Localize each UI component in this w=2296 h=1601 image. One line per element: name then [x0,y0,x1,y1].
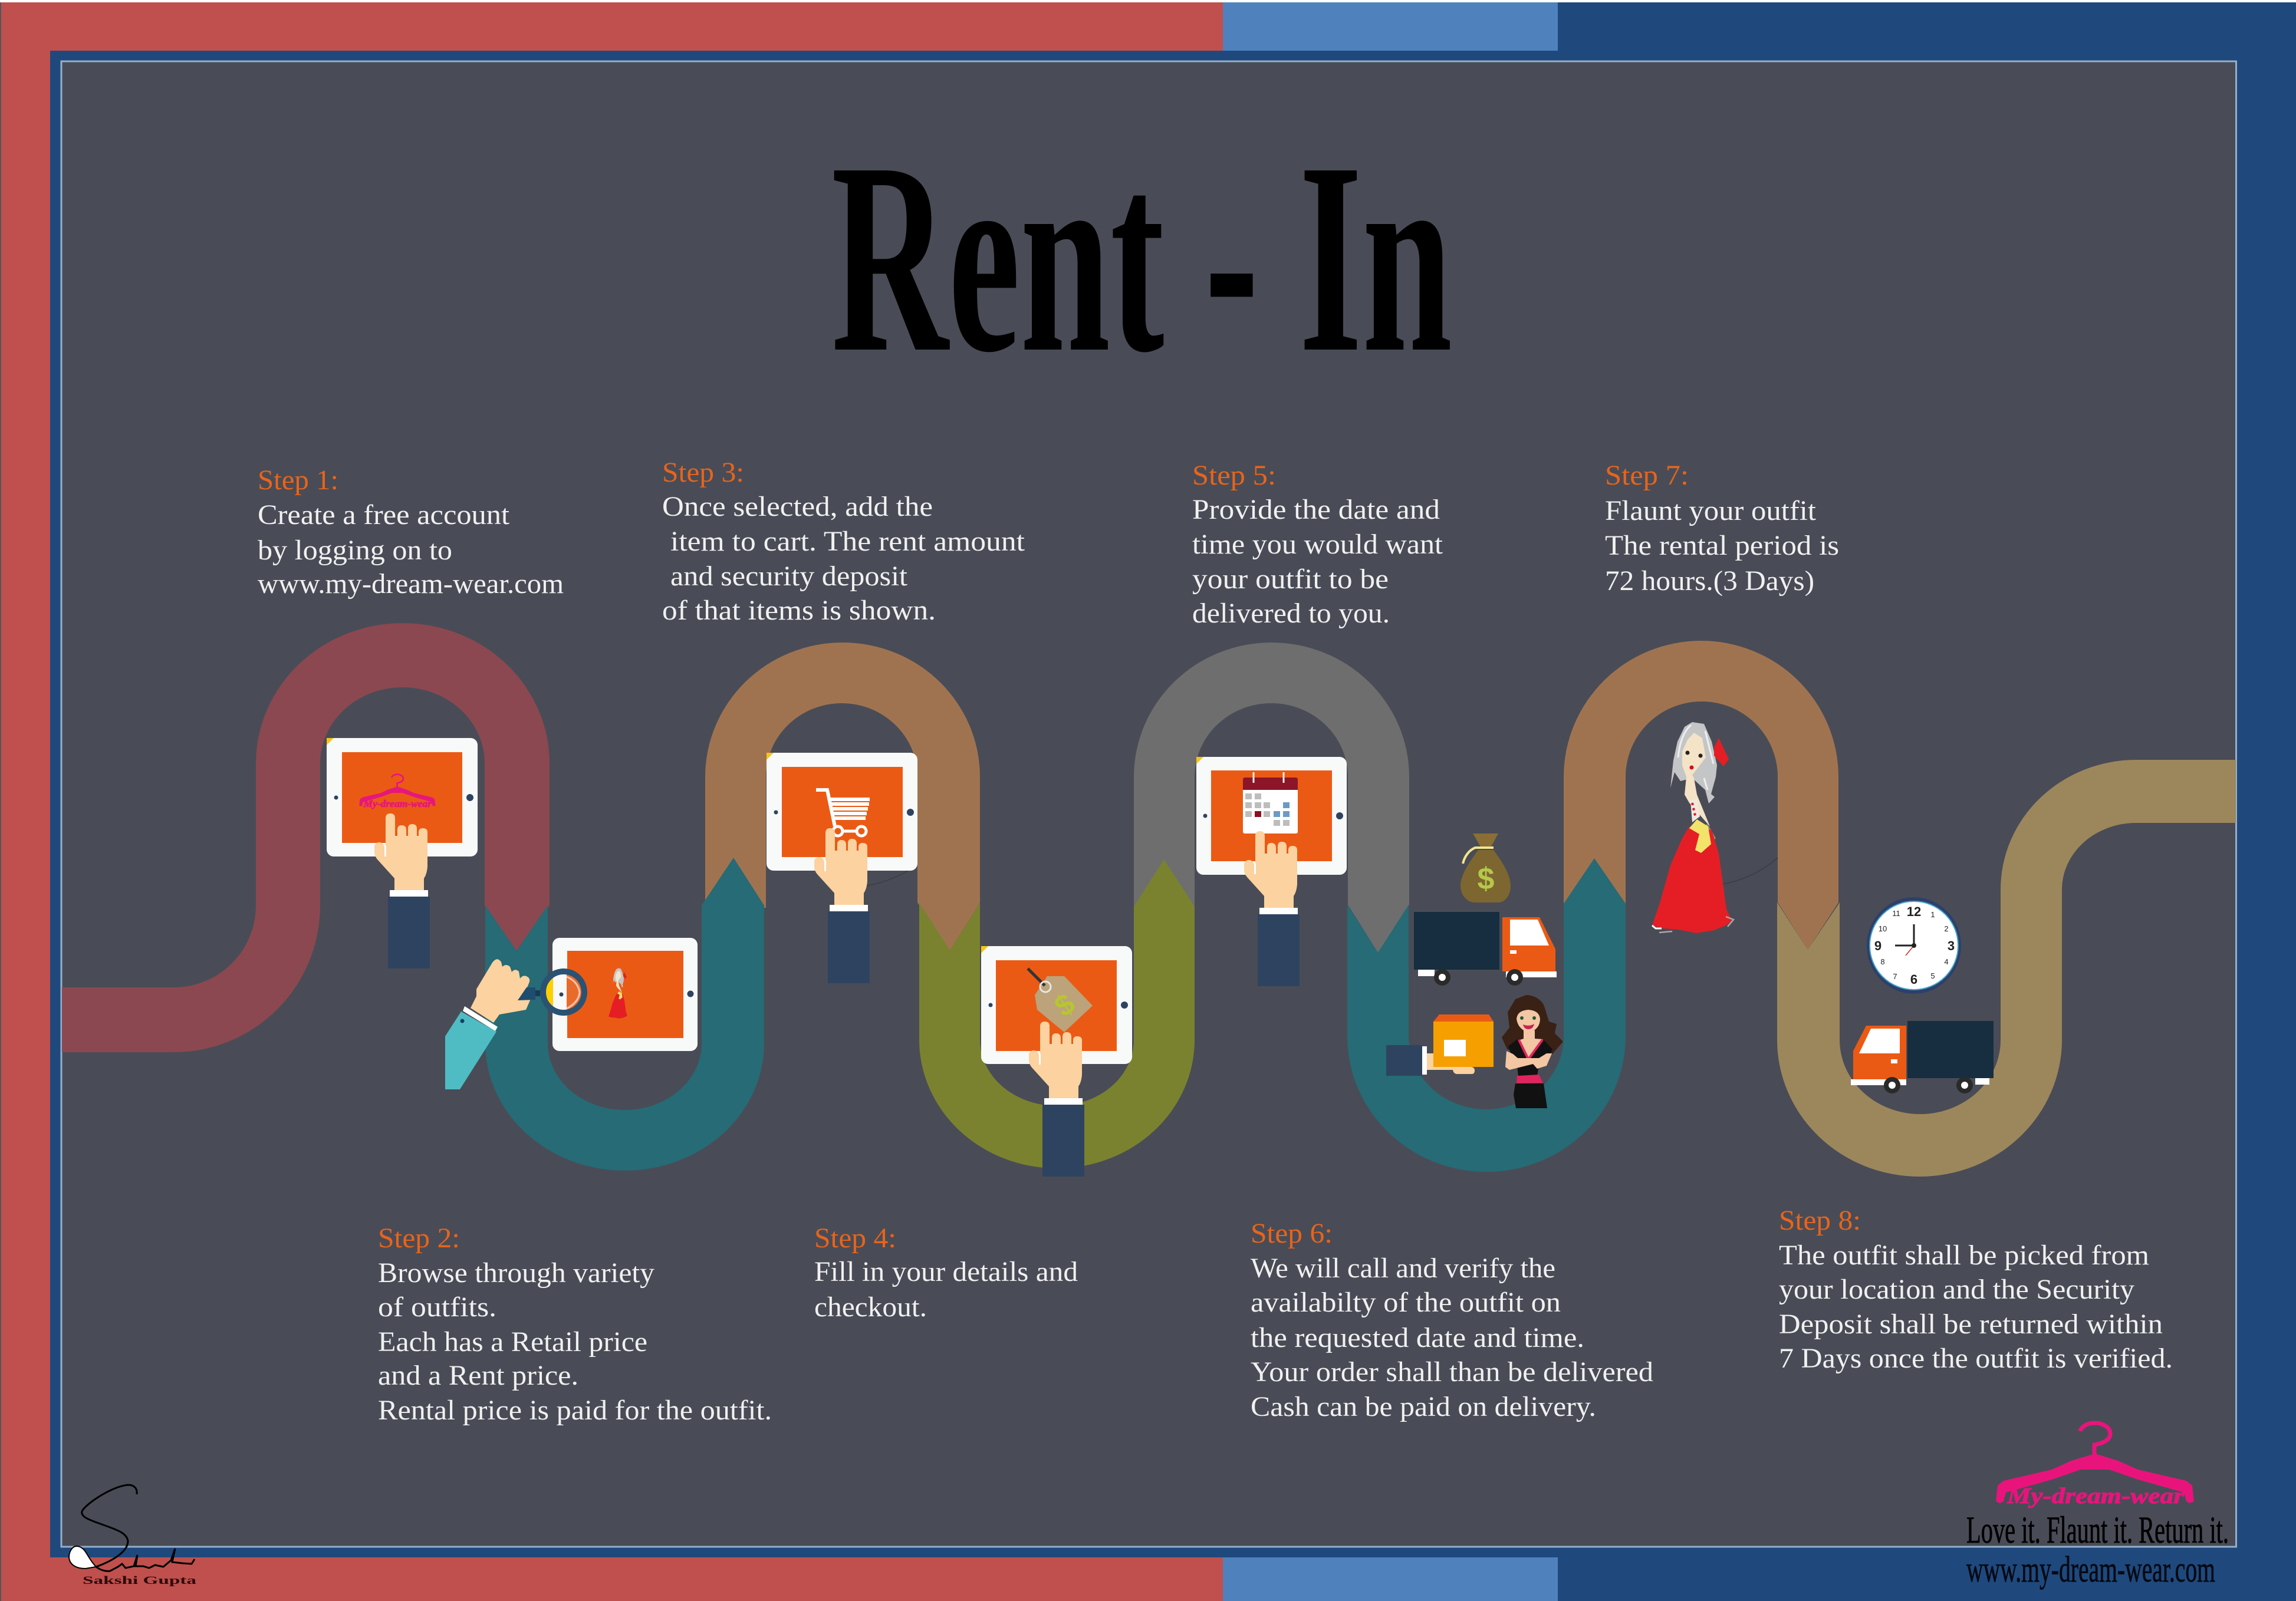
hand with magnifier [445,959,584,1089]
icon: calendar [1243,772,1298,834]
path segment: olive valley [919,859,1195,1168]
icon: hanger logo small [359,775,436,809]
step 4 text: checkout. [814,1292,927,1323]
icon: girl in red dress [1652,722,1733,933]
step 1 text [258,465,564,599]
step 7 text [1605,460,1839,597]
step 2 text: Rental price is paid for the outfit. [378,1395,772,1426]
icon: mini girl in red dress [608,968,627,1019]
icon: shopping cart [816,790,870,836]
hand 5 [1244,831,1300,986]
icon: wall clock: 8 [1880,957,1885,966]
step 2 text: Browse through variety [378,1257,654,1289]
icon: wall clock: 2 [1944,924,1949,933]
path segment: brown arch 2 [1564,641,1838,950]
path segment: gray arch [1134,643,1409,953]
path segment: teal valley 2 [1347,858,1626,1172]
step 6 text: Cash can be paid on delivery. [1251,1391,1596,1422]
step 6 text: the requested date and time. [1251,1322,1584,1353]
step 6 text [1251,1218,1653,1422]
step 6 text: Step 6: [1251,1218,1333,1249]
icon: wall clock: 3 [1948,938,1955,953]
icon: hanger: My-dream-wear [2006,1484,2185,1508]
hand 4 [1029,1022,1084,1177]
step 8 text: 7 Days once the outfit is verified. [1779,1343,2173,1374]
tablet 1: logo [327,738,478,856]
hand 1 [374,813,430,968]
brand logo [1966,1423,2229,1590]
tablet 3: cart [767,753,917,871]
tablet 2: browse [552,938,698,1051]
path segment: red arch [62,623,550,1052]
step 8 text: Step 8: [1779,1205,1861,1236]
hand 3 [814,828,870,983]
step 3 text: Once selected, add the [662,491,933,522]
icon: wall clock: 9 [1874,938,1881,953]
step 5 text: delivered to you. [1192,598,1390,629]
icon: wall clock: 10 [1879,924,1887,933]
icon: magnifier lens [543,971,584,1013]
icon: hanger logo small: My-dream-wear [363,798,432,809]
icon: return truck [1851,1021,1994,1093]
icon: woman in black dress [1502,995,1563,1108]
icon: hanger [1996,1423,2194,1508]
step 5 text: Provide the date and [1192,494,1440,525]
step 2 text: Step 2: [378,1223,460,1254]
step 5 text: your outfit to be [1192,564,1389,595]
step 4 text: Step 4: [814,1223,896,1254]
tablet 5: calendar [1196,757,1347,875]
icon: wall clock: 6 [1910,972,1917,987]
icon: money bag: $ [1478,862,1495,896]
path segment: brown arch 1 [705,643,980,950]
icon: hand holding parcel [1386,1014,1494,1076]
icon: wall clock: 5 [1930,971,1935,980]
icon: money bag [1461,834,1511,902]
step 1 text: Create a free account [258,499,510,531]
step 1 text: www.my-dream-wear.com [258,568,564,599]
step 3 text [662,457,1025,626]
icon: wall clock [1867,897,1961,994]
winding path [62,623,2236,1177]
icon: wall clock: 11 [1892,909,1900,918]
step 2 text: Each has a Retail price [378,1326,647,1358]
signature name: Sakshi Gupta [83,1574,197,1587]
tablet 4: price tag [981,946,1132,1064]
step 2 text: of outfits. [378,1292,496,1323]
icon: wall clock: 12 [1907,904,1921,919]
path segment: tan valley and exit [1777,760,2236,1177]
icon: wall clock: 7 [1893,972,1897,981]
title: Rent - In [831,107,1452,409]
step 5 text: Step 5: [1192,460,1276,491]
step 2 text: and a Rent price. [378,1360,578,1391]
icon: wall clock: 1 [1930,910,1935,919]
icon: price tag: $ [1048,987,1081,1023]
path segment: teal valley 1 [485,858,764,1171]
step 3 text: item to cart. The rent amount [670,526,1025,557]
step 8 text: The outfit shall be picked from [1779,1240,2149,1271]
step 2 text [378,1223,772,1426]
step 5 text: time you would want [1192,529,1443,560]
step 4 text [814,1223,1078,1323]
signature [69,1485,197,1587]
step 3 text: of that items is shown. [662,595,936,626]
step 8 text [1779,1205,2173,1374]
icon: delivery truck [1414,912,1557,986]
step 5 text [1192,460,1443,629]
step 4 text: Fill in your details and [814,1256,1078,1287]
step 8 text: Deposit shall be returned within [1779,1309,2163,1340]
step 1 text: by logging on to [258,535,452,566]
step 7 text: 72 hours.(3 Days) [1605,565,1814,597]
step 6 text: availabilty of the outfit on [1251,1287,1561,1318]
step 6 text: We will call and verify the [1251,1253,1555,1284]
step 7 text: Flaunt your outfit [1605,495,1817,526]
icon: wall clock: 4 [1944,957,1949,966]
step 1 text: Step 1: [258,465,338,496]
step 7 text: The rental period is [1605,530,1839,561]
step 8 text: your location and the Security [1779,1274,2134,1305]
step 7 text: Step 7: [1605,460,1689,491]
step 3 text: and security deposit [670,561,908,592]
step 6 text: Your order shall than be delivered [1251,1356,1653,1388]
icon: price tag [1028,968,1093,1032]
step 3 text: Step 3: [662,457,744,488]
